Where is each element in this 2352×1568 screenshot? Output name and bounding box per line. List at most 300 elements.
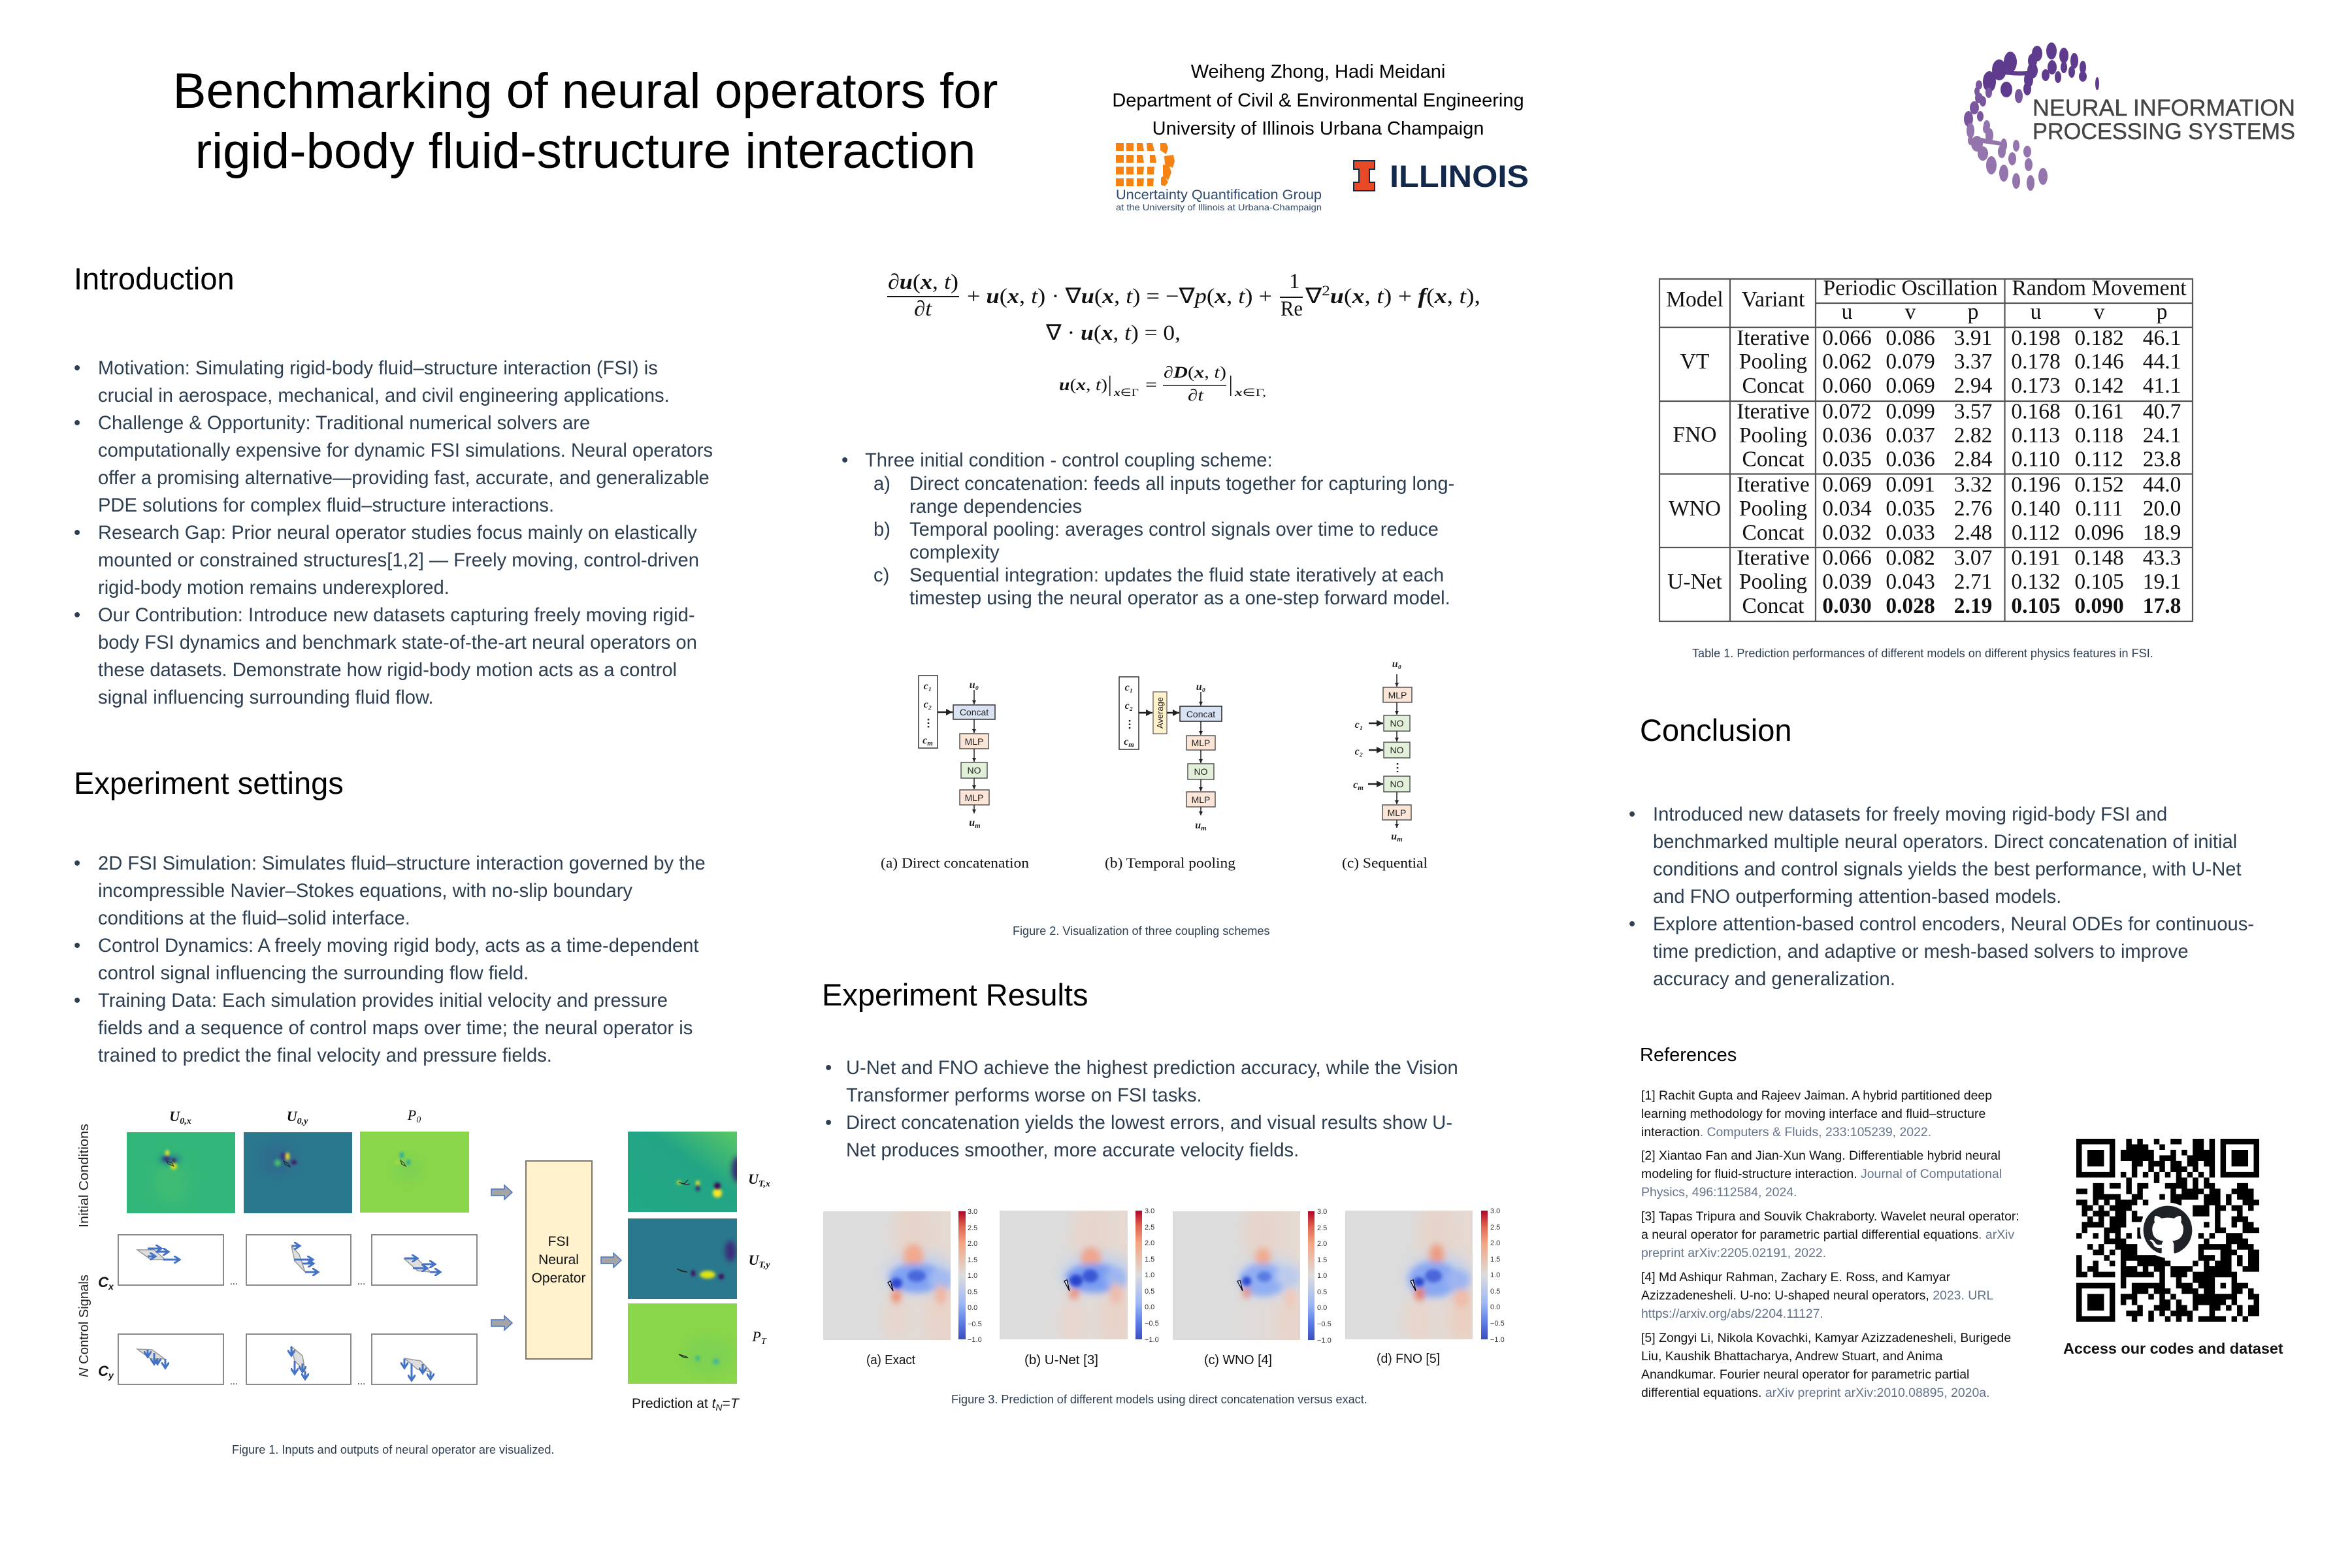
logo: uncertainty quantification group (1116, 143, 1322, 212)
table rows: wno: Iterative (1737, 473, 1810, 497)
label: access codes and dataset: Access our codes and dataset (2063, 1340, 2283, 1357)
labels: output field names: T (761, 1337, 767, 1347)
diagram (b) temporal pooling: MLP (1192, 794, 1210, 805)
labels: input field names: P (408, 1107, 416, 1123)
equation: momentum: Re (1281, 297, 1303, 321)
label: prediction time: = (723, 1396, 730, 1411)
diagram (a) direct concatenation: MLP (965, 792, 983, 803)
text: introduction bullets: body FSI dynamics and benchmark state-of-the-art neural operators on (98, 632, 697, 653)
labels: control axes and times: ... (230, 1276, 238, 1287)
labels: control axes and times: C (98, 1274, 108, 1290)
table rows: fno: 3.57 (1954, 400, 1992, 423)
table rows: wno: 2.48 (1954, 521, 1992, 545)
labels: input field names: 0,x (180, 1117, 191, 1126)
logo: uncertainty quantification group: Uncertainty Quantification Group (1116, 188, 1322, 203)
table rows: vt: 0.079 (1886, 350, 1935, 374)
figure 1: neural operator inputs and outputs (77, 1107, 770, 1418)
text: • (1629, 804, 1635, 825)
table rows: wno: 0.196 (2011, 473, 2061, 497)
label: initial conditions: Initial Conditions (77, 1124, 91, 1228)
diagram (b) temporal pooling: u₀ (1196, 681, 1205, 693)
table rows: vt: 44.1 (2143, 350, 2181, 374)
panel (a) exact: 3.0 (968, 1208, 977, 1216)
labels: output field names (748, 1171, 770, 1347)
table header: u (2031, 300, 2042, 324)
table rows: vt: Iterative (1737, 326, 1810, 350)
diagram (c) sequential: c (1353, 779, 1358, 791)
title: Benchmarking of neural operators for (173, 63, 998, 119)
heading: conclusion: Conclusion (1640, 713, 1792, 747)
text: references list: preprint arXiv:2205.02191, 2022. (1641, 1246, 1826, 1260)
heatmap: p0 (360, 1132, 469, 1213)
heading: experiment settings: Experiment settings (74, 766, 344, 800)
panel (a) exact: 1.5 (968, 1256, 977, 1264)
diagram (b) temporal pooling: MLP (1192, 738, 1210, 748)
equation: momentum: 2 (1322, 282, 1330, 299)
diagram (a) direct concatenation: c (923, 735, 927, 746)
table rows: u-net: Iterative (1737, 546, 1810, 570)
table header: v (2094, 300, 2105, 324)
panel (c) wno: 0.5 (1317, 1288, 1327, 1296)
diagram (b) temporal pooling: NO (1194, 766, 1208, 777)
panel (b) u-net (1000, 1204, 1159, 1348)
text: introduction bullets: Our Contribution: Introduce new datasets capturing freely moving rigid- (98, 605, 695, 626)
panel (c) wno: −0.5 (1317, 1320, 1331, 1328)
text: coupling schemes: timestep using the neural operator as a one-step forward model. (909, 588, 1450, 609)
panel (d) fno (1345, 1201, 1505, 1345)
diagram (a) direct concatenation: u₀ (970, 679, 979, 691)
table rows: wno: 0.112 (2012, 521, 2060, 545)
table rows: u-net: U-Net (1667, 570, 1723, 594)
text: experiment settings bullets: incompressible Navier–Stokes equations, with no-slip boundary (98, 881, 632, 902)
panel (a) exact: 1.0 (968, 1272, 977, 1280)
table rows: wno: 0.152 (2074, 473, 2124, 497)
labels: control axes and times: ... (357, 1376, 365, 1387)
table rows: u-net: 43.3 (2143, 546, 2181, 570)
table rows: u-net (1667, 546, 2181, 618)
box: fsi neural operator: Neural (538, 1252, 579, 1267)
table rows: u-net: 2.71 (1954, 570, 1992, 594)
text: coupling schemes: Three initial condition - control coupling scheme: (865, 450, 1273, 471)
table header: Model (1666, 287, 1723, 312)
table rows: vt: 0.146 (2074, 350, 2124, 374)
figure 3: model prediction fields (823, 1207, 1505, 1367)
table rows: wno: 0.034 (1822, 497, 1872, 521)
table rows: vt: 0.142 (2074, 374, 2124, 398)
panel (d) fno: 1.0 (1490, 1271, 1500, 1279)
table rows: u-net: 0.132 (2011, 570, 2061, 594)
caption: figure 2: Figure 2. Visualization of three coupling schemes (1013, 924, 1270, 938)
text: experiment settings bullets (74, 853, 706, 1066)
text: references list: modeling for fluid-structure interaction. Journal of Computational (1641, 1167, 2002, 1181)
table header: v (1905, 300, 1916, 324)
diagram (b) temporal pooling: m (1201, 825, 1207, 832)
text: • (1629, 914, 1635, 935)
panel (d) fno: 2.0 (1490, 1239, 1500, 1247)
heatmap: pt (628, 1303, 737, 1384)
labels: output field names: U (748, 1171, 759, 1187)
table rows: vt: 0.086 (1886, 326, 1935, 350)
diagram (b) temporal pooling: c₂ (1125, 700, 1133, 711)
table rows: fno: 0.099 (1886, 400, 1935, 423)
table rows: wno: 0.033 (1886, 521, 1935, 545)
table rows: u-net: Concat (1742, 594, 1805, 618)
text: • (74, 936, 80, 956)
text: references list: [4] Md Ashiqur Rahman, Zachary E. Ross, and Kamyar (1641, 1270, 1950, 1284)
text: references list: [1] Rachit Gupta and Rajeev Jaiman. A hybrid partitioned deep (1641, 1088, 1992, 1103)
table header: Periodic Oscillation (1823, 276, 1998, 301)
table rows: fno (1673, 400, 2181, 472)
equation: no-slip boundary condition: x∈Γ (1113, 387, 1139, 399)
text: introduction bullets: offer a promising alternative—providing fast, accurate, and generalizable (98, 468, 710, 489)
table grid (1659, 279, 2193, 621)
box: fsi neural operator: FSI (548, 1234, 569, 1249)
equation: momentum: ∇ (1305, 285, 1320, 308)
text: references list: [3] Tapas Tripura and Souvik Chakraborty. Wavelet neural operator: (1641, 1209, 2019, 1224)
table rows: u-net: 0.105 (2011, 594, 2061, 618)
table rows: u-net: 0.028 (1886, 594, 1935, 618)
diagram (a) direct concatenation: u (969, 817, 975, 828)
table rows: vt: 0.062 (1822, 350, 1872, 374)
panel (d) fno: 3.0 (1490, 1207, 1500, 1215)
authors and affiliation: Department of Civil & Environmental Engineering (1112, 90, 1524, 111)
table rows: vt: Concat (1742, 374, 1805, 398)
diagram (a) direct concatenation: m (927, 740, 933, 747)
text: • (74, 358, 80, 379)
text: conclusion bullets: accuracy and generalization. (1653, 969, 1895, 990)
table rows: wno: 18.9 (2143, 521, 2181, 545)
text: introduction bullets: crucial in aerospace, mechanical, and civil engineering applications. (98, 385, 670, 406)
panel (c) wno: 2.5 (1317, 1224, 1327, 1232)
labels: input field names (169, 1107, 421, 1126)
panel (a) exact: −1.0 (968, 1336, 982, 1344)
table header: Variant (1742, 287, 1805, 312)
table rows: vt: 3.37 (1954, 350, 1992, 374)
logo: neural information processing systems: NEURAL INFORMATION (2033, 95, 2295, 121)
equation: continuity: ∇ · u(x, t) = 0, (1045, 321, 1181, 345)
labels: output field names: T,y (759, 1260, 770, 1270)
text: experiment settings bullets: control signal influencing the surrounding flow field. (98, 963, 529, 984)
text: introduction bullets: computationally expensive for dynamic FSI simulations. Neural operators (98, 440, 713, 461)
table rows: vt: VT (1680, 350, 1709, 374)
label: n control signals: N Control Signals (77, 1275, 91, 1377)
table rows: u-net: 0.191 (2011, 546, 2061, 570)
diagram (a) direct concatenation: m (975, 822, 981, 830)
table header: Random Movement (2012, 276, 2187, 301)
text: coupling schemes: range dependencies (909, 497, 1082, 517)
table header: u (1842, 300, 1853, 324)
panel labels (866, 1352, 1440, 1367)
text: references list: [2] Xiantao Fan and Jian-Xun Wang. Differentiable hybrid neural (1641, 1149, 2001, 1163)
equation: momentum (887, 270, 1480, 321)
panel (b) u-net: 1.0 (1145, 1271, 1154, 1279)
table rows: fno: 0.161 (2074, 400, 2124, 423)
heatmap: u0x (127, 1132, 235, 1213)
equation: momentum: + u(x, t) · ∇u(x, t) = −∇ p(x, t) + (967, 285, 1272, 308)
authors and affiliation (1112, 61, 1524, 139)
diagram (c) sequential: c₁ (1355, 719, 1363, 730)
table rows: u-net: 0.030 (1822, 594, 1872, 618)
table rows: vt: 3.91 (1954, 326, 1992, 350)
table rows: fno: 0.118 (2075, 423, 2123, 448)
labels: output field names: T,x (759, 1179, 770, 1189)
text: conclusion bullets: time prediction, and adaptive or mesh-based solvers to improve (1653, 941, 2189, 962)
diagram (c) sequential: NO (1390, 718, 1404, 728)
diagram (c) sequential: NO (1390, 779, 1404, 789)
table rows: fno: 0.036 (1822, 423, 1872, 448)
labels: input field names: U (287, 1108, 297, 1124)
diagram (c) sequential: u₀ (1392, 659, 1401, 670)
text: coupling schemes: Direct concatenation: feeds all inputs together for capturing long- (909, 474, 1454, 495)
table rows: u-net: 17.8 (2143, 594, 2181, 618)
panel (b) u-net: −1.0 (1145, 1336, 1159, 1344)
text: experiment settings bullets: Control Dynamics: A freely moving rigid body, acts as a time-dependent (98, 936, 698, 956)
table rows: vt: 0.198 (2011, 326, 2061, 350)
table rows: wno: 0.096 (2074, 521, 2124, 545)
equation: no-slip boundary condition: u(x, t) (1059, 376, 1107, 394)
equation: no-slip boundary condition: ∂t (1188, 387, 1204, 404)
text: coupling schemes: a) (874, 474, 890, 495)
text: conclusion bullets: Introduced new datasets for freely moving rigid-body FSI and (1653, 804, 2167, 825)
sub-captions: (a) Direct concatenation (881, 855, 1029, 871)
equation: no-slip boundary condition: = (1145, 376, 1157, 394)
text: coupling schemes: b) (874, 519, 890, 540)
table rows: fno: Concat (1742, 447, 1805, 472)
labels: input field names: 0,y (297, 1117, 308, 1126)
equation: momentum: ∂u(x, t) (888, 270, 958, 294)
sub-captions: (c) Sequential (1342, 855, 1428, 871)
caption: figure 3: Figure 3. Prediction of different models using direct concatenation versus exact. (951, 1393, 1367, 1406)
text: references list: a neural operator for parametric partial differential equations. arXiv (1641, 1228, 2014, 1242)
table rows: u-net: 2.19 (1954, 594, 1992, 618)
diagram (c) sequential: m (1358, 784, 1364, 792)
text: coupling schemes: complexity (909, 542, 1000, 563)
text: • (74, 523, 80, 544)
table rows: wno: 0.035 (1886, 497, 1935, 521)
text: introduction bullets: rigid-body motion remains underexplored. (98, 578, 449, 598)
labels: control axes and times: y (108, 1370, 114, 1380)
labels: input field names: U (169, 1108, 180, 1124)
text: references list: learning methodology for moving interface and fluid–structure (1641, 1107, 1985, 1121)
table rows: u-net: 0.043 (1886, 570, 1935, 594)
table header: p (1968, 300, 1978, 324)
table rows: vt: 2.94 (1954, 374, 1993, 398)
table rows: wno: 0.069 (1822, 473, 1872, 497)
diagram (a) direct concatenation: NO (967, 765, 981, 776)
panel (d) fno: 0.5 (1490, 1288, 1500, 1296)
diagram (c) sequential: MLP (1388, 690, 1407, 700)
labels: control axes and times: C (98, 1363, 108, 1379)
labels: control axes and times (98, 1274, 430, 1433)
control maps: cx row (118, 1235, 477, 1285)
table rows: wno: 0.111 (2076, 497, 2123, 521)
table rows: u-net: 0.082 (1886, 546, 1935, 570)
diagram (c) sequential: m (1397, 836, 1403, 843)
diagram (c) sequential: u (1391, 831, 1397, 842)
text: coupling schemes: c) (874, 565, 889, 586)
panel (a) exact: 0.0 (968, 1304, 977, 1312)
table rows: fno: 0.113 (2012, 423, 2060, 448)
table rows: fno: 24.1 (2143, 423, 2181, 448)
text: experiment settings bullets: 2D FSI Simulation: Simulates fluid–structure interaction governed by the (98, 853, 706, 874)
table rows: vt: Pooling (1739, 350, 1807, 374)
table rows: wno: Concat (1742, 521, 1805, 545)
labels: control axes and times: x (108, 1281, 114, 1292)
table header: p (2157, 300, 2167, 324)
panel (d) fno: 0.0 (1490, 1303, 1500, 1311)
table rows: fno: 2.82 (1954, 423, 1992, 448)
diagram (a) direct concatenation: c₂ (924, 699, 932, 710)
panel (b) u-net: 2.0 (1145, 1239, 1154, 1247)
labels: control axes and times: ... (230, 1376, 238, 1387)
text: references list (1641, 1088, 2019, 1400)
caption: table 1: Table 1. Prediction performances of different models on different physics features in FSI. (1692, 647, 2153, 660)
text: references list: interaction. Computers & Fluids, 233:105239, 2022. (1641, 1125, 1931, 1139)
qr code with github logo (2076, 1139, 2259, 1322)
table rows: fno: 23.8 (2143, 447, 2181, 472)
panel (a) exact: 2.5 (968, 1224, 977, 1232)
text: • (841, 450, 848, 471)
table rows: vt: 0.069 (1886, 374, 1935, 398)
panel (b) u-net: 2.5 (1145, 1224, 1154, 1232)
text: introduction bullets: these datasets. Demonstrate how rigid-body motion acts as a control (98, 660, 677, 681)
diagram (b) temporal pooling: c₁ (1125, 682, 1133, 693)
panel (b) u-net: 0.5 (1145, 1288, 1154, 1296)
table rows: wno: 44.0 (2143, 473, 2181, 497)
table header (1666, 276, 2187, 324)
table rows: fno: 0.035 (1822, 447, 1872, 472)
text: conclusion bullets: conditions and control signals yields the best performance, with U-Net (1653, 859, 2242, 880)
table rows: wno: Pooling (1739, 497, 1807, 521)
text: experiment settings bullets: fields and a sequence of control maps over time; the neural operator is (98, 1018, 693, 1039)
table rows: vt: 0.066 (1822, 326, 1872, 350)
text: introduction bullets: mounted or constrained structures[1,2] — Freely moving, control-driven (98, 550, 699, 571)
text: • (74, 990, 80, 1011)
panel (d) fno: 2.5 (1490, 1224, 1500, 1232)
table rows: wno: 0.140 (2011, 497, 2061, 521)
panel (c) wno: 1.5 (1317, 1256, 1327, 1264)
panel labels: (c) WNO [4] (1204, 1353, 1272, 1367)
table rows: fno: 0.037 (1886, 423, 1935, 448)
logo: uncertainty quantification group: at the University of Illinois at Urbana-Champaign (1116, 202, 1322, 212)
control maps: cy row (118, 1334, 477, 1384)
panel (b) u-net: 0.0 (1145, 1303, 1154, 1311)
text: references list: Liu, Kaushik Bhattacharya, Andrew Stuart, and Anima (1641, 1349, 1942, 1364)
sub-captions (881, 855, 1428, 871)
label: prediction time: N (715, 1402, 723, 1413)
heading: experiment results: Experiment Results (822, 977, 1088, 1012)
table rows: fno: FNO (1673, 423, 1717, 447)
text: experiment results bullets: Direct concatenation yields the lowest errors, and visual results show U- (846, 1113, 1452, 1134)
panel (c) wno: −1.0 (1317, 1337, 1331, 1345)
text: introduction bullets: Research Gap: Prior neural operator studies focus mainly on elastically (98, 523, 697, 544)
equation: momentum: (x, t) + f(x, t), (1344, 285, 1478, 308)
table rows: vt: 0.060 (1822, 374, 1872, 398)
panel (c) wno: 1.0 (1317, 1272, 1327, 1280)
table rows: fno: Iterative (1737, 400, 1810, 423)
text: experiment settings bullets: conditions at the fluid–solid interface. (98, 908, 410, 929)
heatmap: uty (628, 1218, 737, 1299)
arrows: inputs to operator (491, 1185, 621, 1330)
text: references list: Physics, 496:112584, 2024. (1641, 1185, 1797, 1200)
label: prediction time: Prediction at t (632, 1396, 715, 1411)
equation: no-slip boundary condition: x∈Γ, (1234, 387, 1266, 399)
table rows: vt (1680, 326, 2181, 398)
title (173, 63, 998, 179)
labels: output field names: U (749, 1252, 759, 1268)
heatmap: u0y (244, 1132, 352, 1213)
text: coupling schemes (841, 450, 1454, 609)
text: references list: Azizzadenesheli. U-no: U-shaped neural operators, 2023. URL (1641, 1288, 1993, 1303)
panel labels: (a) Exact (866, 1353, 915, 1367)
diagram (a) direct concatenation (919, 676, 995, 830)
box: fsi neural operator: Operator (532, 1271, 585, 1286)
diagram (a) direct concatenation: Concat (960, 707, 988, 717)
sub-captions: (b) Temporal pooling (1105, 855, 1235, 871)
text: experiment settings bullets: Training Data: Each simulation provides initial velocity and pressure (98, 990, 668, 1011)
panel (b) u-net: 3.0 (1145, 1207, 1154, 1215)
text: introduction bullets: Challenge & Opportunity: Traditional numerical solvers are (98, 413, 590, 434)
diagram (a) direct concatenation: c₁ (924, 681, 932, 692)
panel (c) wno: 3.0 (1317, 1208, 1327, 1216)
table rows: fno: 0.072 (1822, 400, 1872, 423)
equation: no-slip boundary condition: ∂D(x, t) (1164, 364, 1226, 382)
authors and affiliation: University of Illinois Urbana Champaign (1152, 118, 1484, 139)
table rows: u-net: 0.148 (2074, 546, 2124, 570)
text: references list: https://arxiv.org/abs/2204.11127. (1641, 1307, 1823, 1321)
panel (c) wno: 2.0 (1317, 1240, 1327, 1248)
heatmap: utx (628, 1132, 737, 1212)
text: conclusion bullets: benchmarked multiple neural operators. Direct concatenation of initial (1653, 832, 2237, 853)
table: prediction performance (1658, 276, 2194, 622)
diagram (c) sequential: NO (1390, 745, 1404, 755)
diagram (b) temporal pooling: Concat (1186, 709, 1215, 719)
text: experiment results bullets: U-Net and FNO achieve the highest prediction accuracy, while the Vision (846, 1058, 1458, 1079)
diagram (b) temporal pooling: Average (1155, 697, 1165, 728)
text: conclusion bullets: Explore attention-based control encoders, Neural ODEs for continuous- (1653, 914, 2254, 935)
authors and affiliation: Weiheng Zhong, Hadi Meidani (1191, 61, 1445, 82)
text: introduction bullets: signal influencing surrounding fluid flow. (98, 687, 434, 708)
text: • (825, 1113, 832, 1134)
text: coupling schemes: Sequential integration: updates the fluid state iteratively at each (909, 565, 1444, 586)
logo: neural information processing systems: PROCESSING SYSTEMS (2033, 119, 2295, 144)
diagram (c) sequential (1353, 659, 1412, 843)
text: • (74, 853, 80, 874)
text: experiment results bullets (825, 1058, 1458, 1161)
table rows: u-net: Pooling (1739, 570, 1807, 594)
panel (c) wno: 0.0 (1317, 1304, 1327, 1312)
text: references list: [5] Zongyi Li, Nikola Kovachki, Kamyar Azizzadenesheli, Burigede (1641, 1331, 2011, 1345)
equation: momentum: ∂t (914, 297, 932, 321)
table rows: fno: 40.7 (2143, 400, 2181, 423)
text: references list: differential equations. arXiv preprint arXiv:2010.08895, 2020a. (1641, 1386, 1989, 1400)
panel (a) exact: −0.5 (968, 1320, 982, 1328)
table rows: wno: WNO (1669, 497, 1721, 521)
panel (d) fno: −1.0 (1490, 1336, 1505, 1344)
diagram (b) temporal pooling: u (1195, 820, 1201, 831)
text: experiment results bullets: Transformer performs worse on FSI tasks. (846, 1085, 1202, 1106)
heading: introduction: Introduction (74, 261, 235, 296)
diagram (b) temporal pooling: m (1128, 741, 1134, 749)
panel (b) u-net: −0.5 (1145, 1320, 1159, 1328)
caption: figure 1: Figure 1. Inputs and outputs of neural operator are visualized. (232, 1443, 554, 1456)
text: introduction bullets (74, 358, 713, 708)
logo: illinois: ILLINOIS (1390, 159, 1529, 193)
table rows: fno: 0.168 (2011, 400, 2061, 423)
figure 2: coupling schemes (881, 659, 1428, 871)
diagram (b) temporal pooling: c (1124, 736, 1128, 747)
equation: momentum: u (1330, 285, 1344, 308)
